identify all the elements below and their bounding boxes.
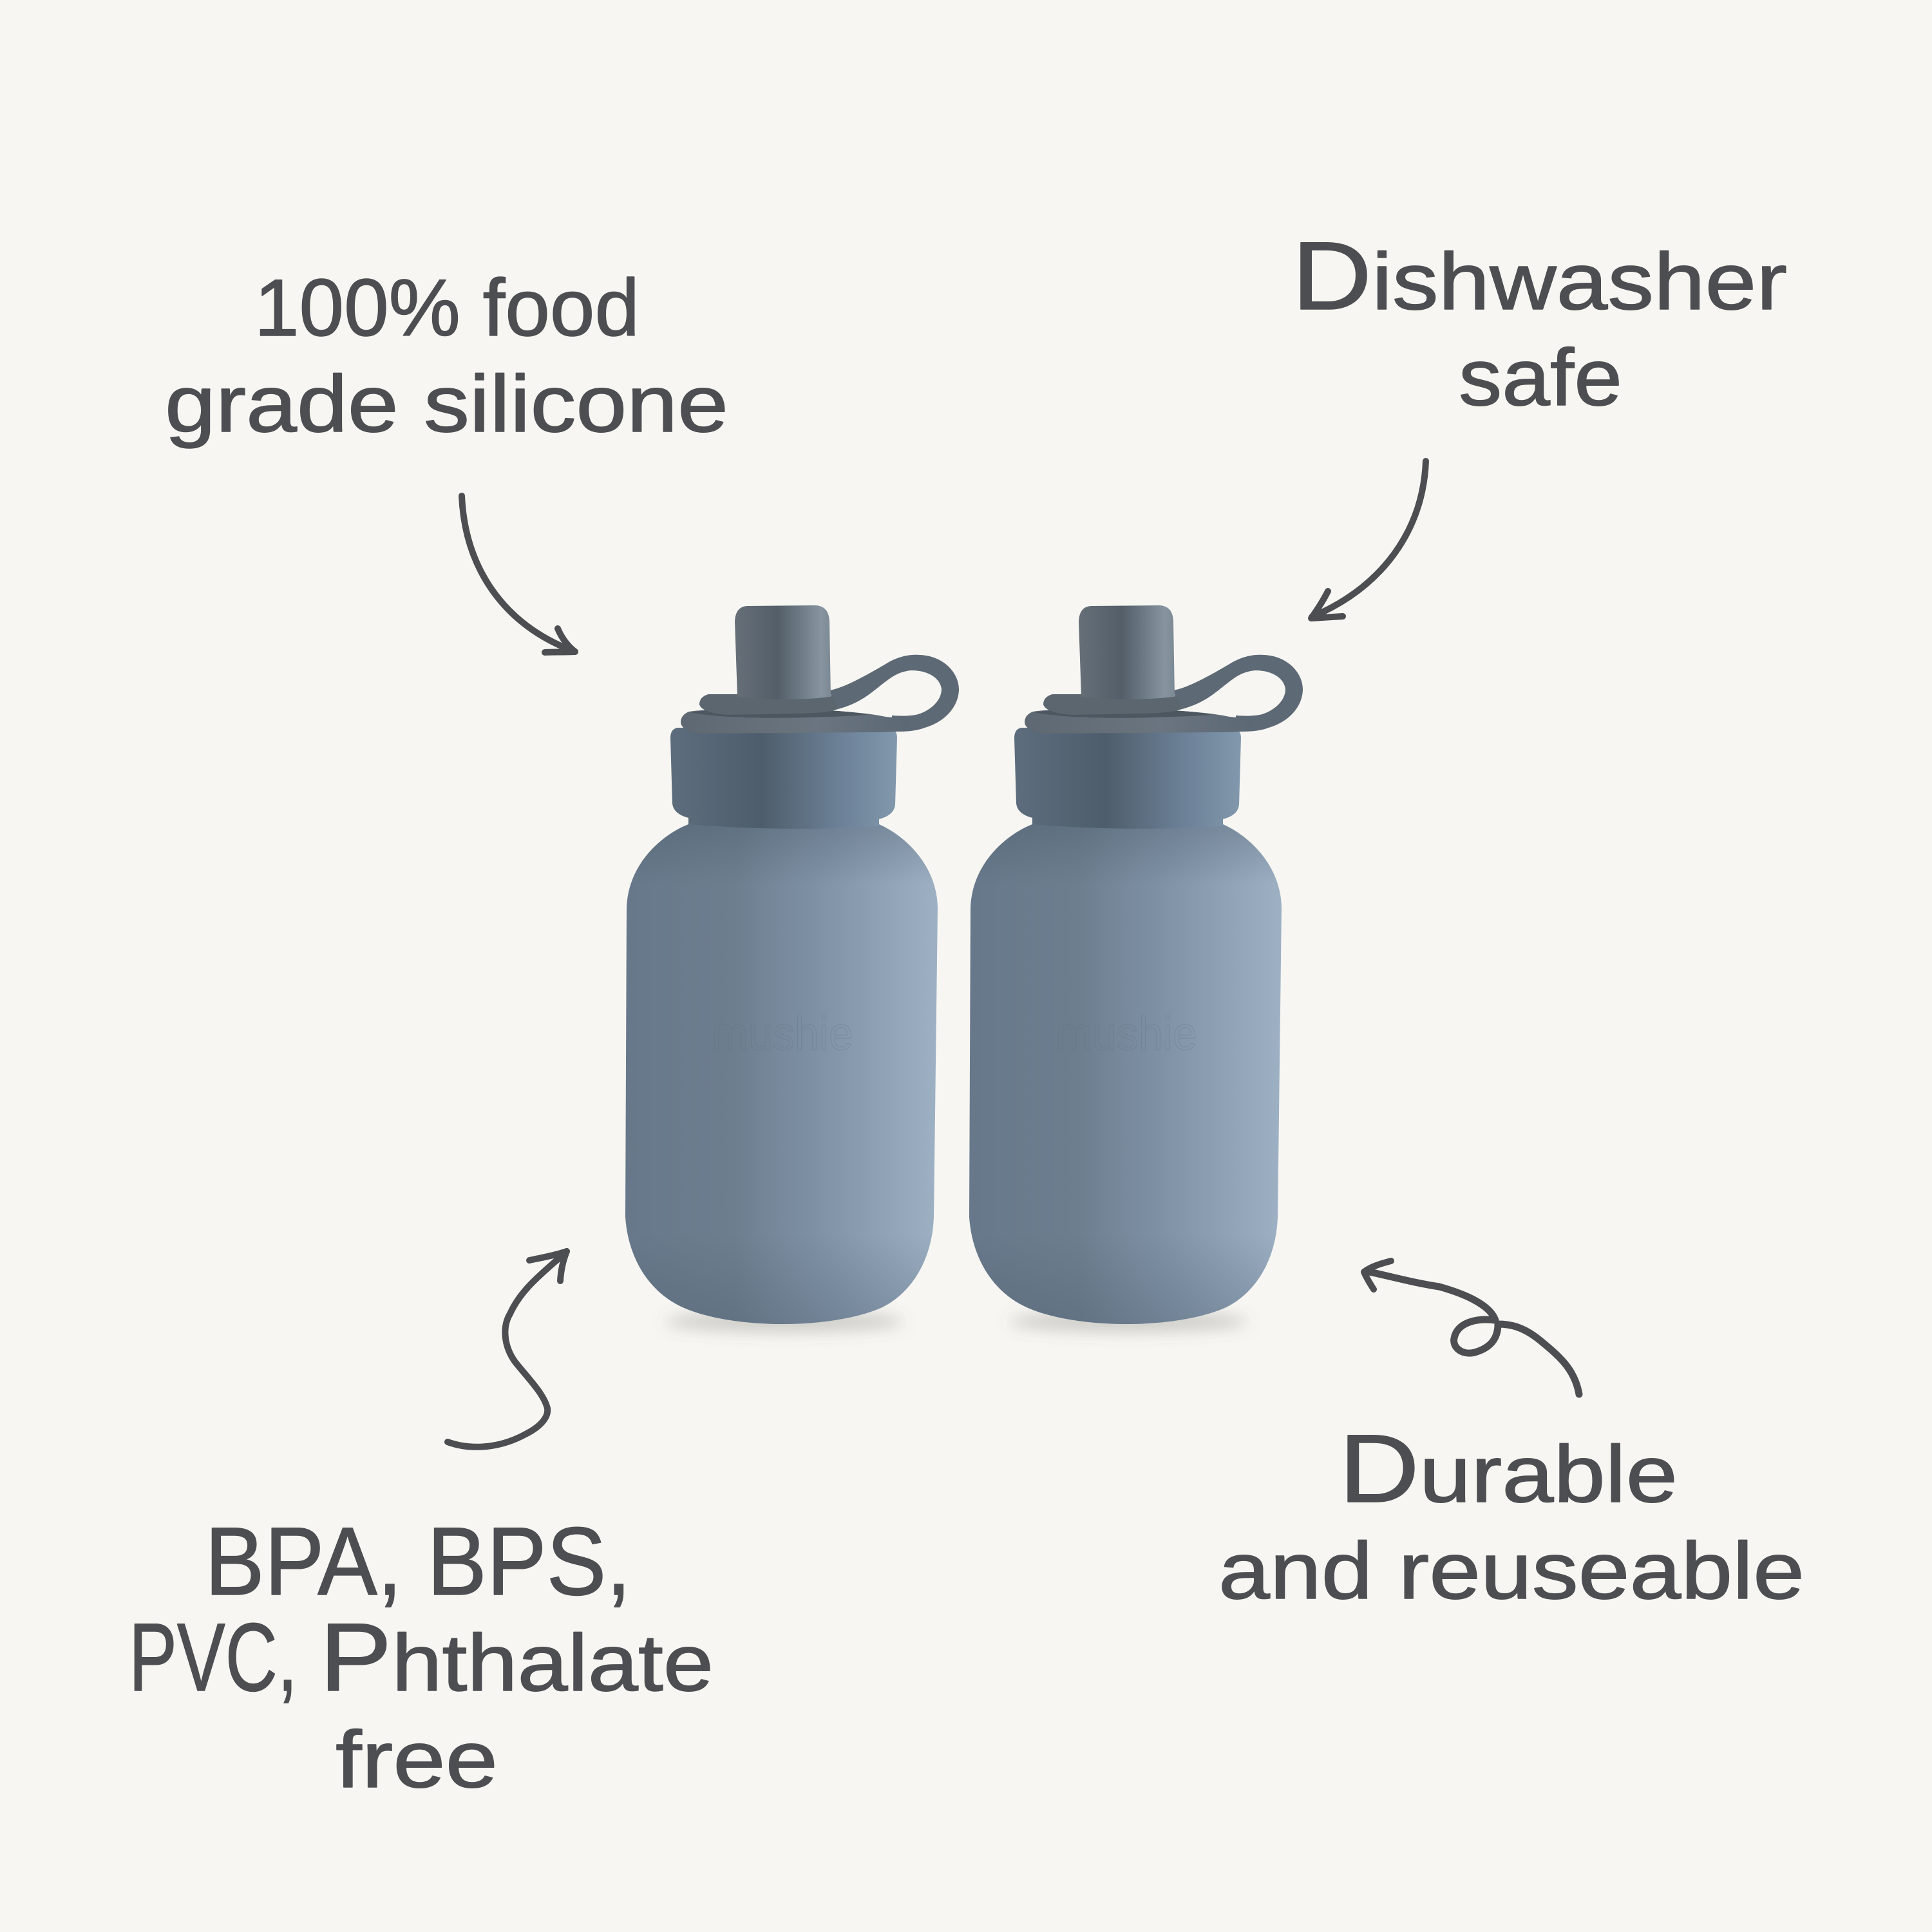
callout: durable and reuseable bbox=[1218, 1414, 1804, 1616]
callout: dishwasher safe bbox=[1292, 222, 1787, 422]
upper lid ring bbox=[1043, 694, 1180, 715]
collar bbox=[1014, 728, 1241, 829]
bottle body bbox=[625, 824, 938, 1324]
callout: BPA free bbox=[129, 1507, 714, 1804]
callout: food grade silicone: 100% food bbox=[254, 263, 639, 353]
ground shadow bbox=[665, 1311, 904, 1332]
bottle left bbox=[625, 605, 959, 1332]
callout: BPA free: PVC, bbox=[129, 1603, 298, 1711]
bottle right bbox=[969, 605, 1303, 1332]
embossed logo: mushie bbox=[712, 1009, 853, 1060]
spout bbox=[735, 605, 831, 699]
collar bbox=[670, 728, 897, 829]
lower ring top face bbox=[1034, 708, 1213, 718]
lower lid ring bbox=[1025, 708, 1251, 734]
bottle body bbox=[969, 824, 1282, 1324]
callout: durable and reuseable: and reuseable bbox=[1218, 1526, 1804, 1616]
callout: dishwasher safe: safe bbox=[1459, 333, 1622, 422]
callout: dishwasher safe: Dishwasher bbox=[1292, 222, 1787, 330]
embossed logo: mushie bbox=[1056, 1009, 1197, 1060]
callout: BPA free: free bbox=[336, 1715, 498, 1804]
lower lid ring bbox=[681, 708, 907, 734]
ground shadow bbox=[1009, 1311, 1247, 1332]
arrow: food grade to bottle bbox=[462, 496, 575, 652]
callout: food grade silicone bbox=[165, 263, 728, 449]
callout: BPA free: BPA, BPS, bbox=[205, 1507, 631, 1615]
lower ring top face bbox=[690, 708, 869, 718]
lid loop bbox=[829, 655, 959, 732]
body shading bbox=[625, 824, 938, 1324]
arrow: durable to bottle bbox=[1364, 1261, 1579, 1394]
spout bbox=[1079, 605, 1175, 699]
arrow: BPA free to bottle bbox=[448, 1251, 567, 1447]
lid loop bbox=[1173, 655, 1303, 732]
body shading bbox=[969, 824, 1282, 1324]
callout: durable and reuseable: Durable bbox=[1339, 1414, 1678, 1522]
upper lid ring bbox=[699, 694, 836, 715]
callout: food grade silicone: grade silicone bbox=[165, 359, 728, 449]
arrow: dishwasher to bottle bbox=[1311, 461, 1426, 618]
callout: BPA free: Phthalate bbox=[319, 1603, 714, 1711]
